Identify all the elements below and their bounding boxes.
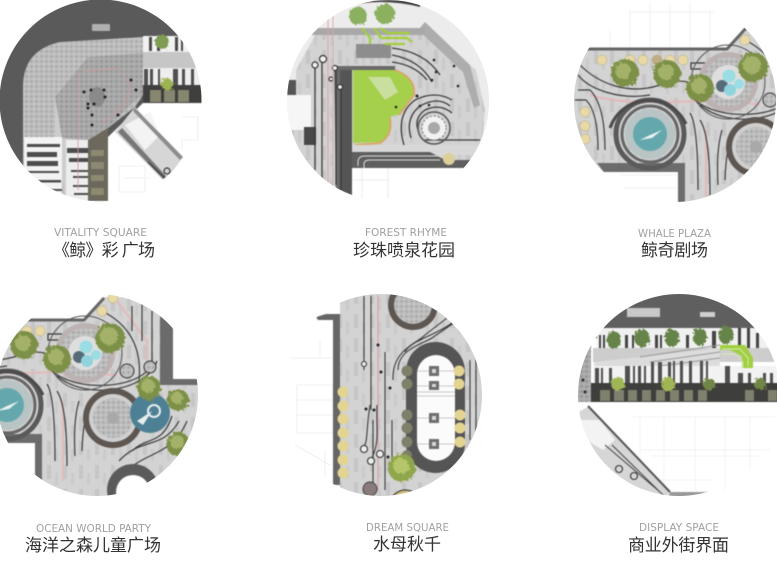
site plan: vitality square [0,0,203,202]
site plan: whale plaza [574,3,776,202]
label: display space [628,522,729,555]
label: ocean world party: OCEAN WORLD PARTY [36,523,152,535]
panel: vitality square [0,0,203,260]
oval court [406,342,465,473]
label: vitality square [53,227,155,260]
panel: ocean world party [0,293,202,555]
panel: whale plaza [560,0,777,260]
label: ocean world party [25,523,161,555]
label: ocean world party: 海洋之森儿童广场 [25,536,161,555]
label: whale plaza [638,228,712,260]
faint CAD lines [290,340,333,475]
label: vitality square: VITALITY SQUARE [54,227,147,239]
site plan: forest rhyme [286,0,490,202]
label: dream square [366,522,449,554]
label: whale plaza: WHALE PLAZA [638,228,712,240]
label: forest rhyme [353,227,455,260]
panel: display space [576,293,777,555]
label: vitality square: 《鲸》彩 广场 [53,241,155,260]
label: forest rhyme: FOREST RHYME [365,227,447,239]
faint CAD lines [632,417,775,490]
label: dream square: 水母秋千 [373,535,441,554]
label: whale plaza: 鲸奇剧场 [641,241,708,260]
panel: dream square [290,280,490,554]
site plan: dream square [316,294,482,496]
panel: forest rhyme [286,0,490,260]
label: forest rhyme: 珍珠喷泉花园 [353,241,455,260]
label: dream square: DREAM SQUARE [366,522,449,534]
site plan: ocean world party [0,294,198,496]
site plan: display space [576,293,777,498]
label: display space: DISPLAY SPACE [639,522,719,534]
label: display space: 商业外街界面 [628,536,729,555]
faint CAD lines [119,117,198,192]
